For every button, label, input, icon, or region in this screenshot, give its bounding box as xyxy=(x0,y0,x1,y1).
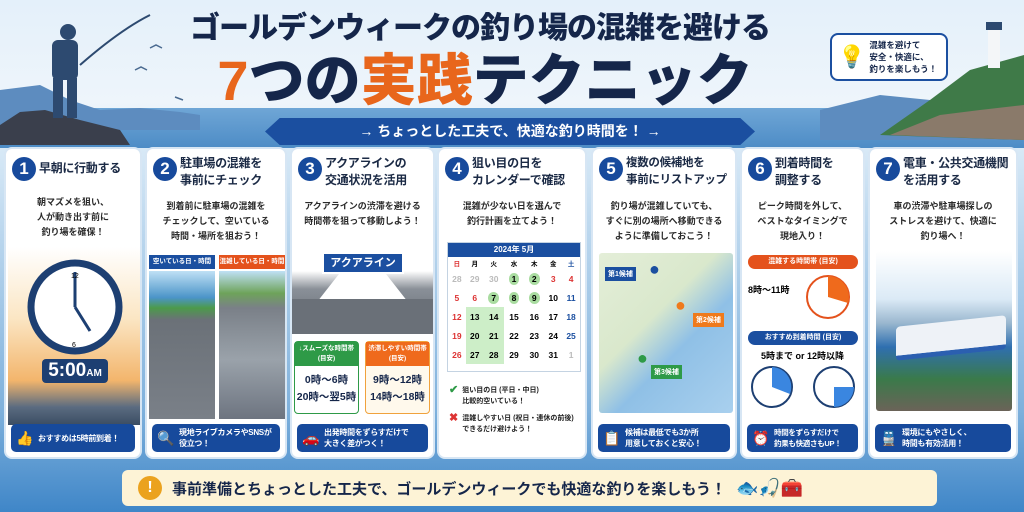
text 4: 混雑が少ない日を選んで xyxy=(463,201,561,211)
calendar: 17 xyxy=(548,312,558,322)
bottom bar 3: 大きく差がつく！ xyxy=(324,439,386,448)
illustration: clock sunrise xyxy=(8,247,140,425)
map: 第3候補 xyxy=(654,369,679,376)
calendar: 23 xyxy=(529,330,539,340)
recommended time clocks xyxy=(748,331,858,345)
map: 第1候補 xyxy=(608,271,633,278)
heading 2: 事前にチェック xyxy=(180,173,262,187)
bottom bar 2 xyxy=(152,424,280,452)
congested time clock xyxy=(748,255,858,269)
text 2: 到着前に駐車場の混雑を xyxy=(166,201,266,211)
text 4 xyxy=(463,200,561,226)
heading 2 xyxy=(180,156,262,187)
bottom bar 5: 📋 xyxy=(603,430,621,446)
footer banner: 事前準備とちょっとした工夫で、ゴールデンウィークでも快適な釣りを楽しもう！ xyxy=(172,480,726,498)
calendar xyxy=(447,242,581,372)
calendar: 31 xyxy=(548,350,558,360)
illustration: lighthouse and cliffs xyxy=(820,22,1024,140)
text 2: 時間・場所を狙おう！ xyxy=(171,231,261,241)
text 2 xyxy=(162,201,270,241)
callout: lightbulb xyxy=(830,33,948,81)
calendar: 火 xyxy=(491,261,497,268)
illustration: coastal train xyxy=(876,251,1012,411)
heading 3 xyxy=(325,156,407,187)
calendar: 20 xyxy=(470,330,479,340)
illustration: parking comparison: 空いている日・時間 xyxy=(153,258,211,265)
title: ゴールデンウィークの釣り場の混雑を避ける xyxy=(190,12,770,45)
bottom bar 6 xyxy=(747,424,858,452)
calendar: 水 xyxy=(511,261,517,268)
panel: 6 arrival time: 6 xyxy=(755,159,765,178)
calendar: 5 xyxy=(455,292,459,302)
bottom bar 2: 🔍 xyxy=(157,430,175,446)
heading 6 xyxy=(775,156,834,187)
heading 3: アクアラインの xyxy=(325,156,406,170)
map: 第2候補 xyxy=(696,317,721,324)
calendar: 9 xyxy=(532,292,537,302)
calendar: 18 xyxy=(566,312,576,322)
panel: 5 candidate spots: 5 xyxy=(606,159,616,178)
heading 5: 複数の候補地を xyxy=(626,157,704,169)
calendar: 26 xyxy=(452,350,462,360)
heading 7 xyxy=(903,156,1008,187)
panel: 3 aqualine: (目安) xyxy=(389,355,406,362)
panel: 1 early morning xyxy=(4,147,142,459)
calendar: 15 xyxy=(509,312,519,322)
calendar: 1 xyxy=(569,350,573,360)
calendar: 10 xyxy=(548,292,558,302)
bottom bar 5: 用意しておくと安心！ xyxy=(625,439,702,448)
calendar: 6 xyxy=(472,292,477,302)
recommended time clocks: おすすめ到着時間 (目安) xyxy=(765,334,841,341)
calendar: 29 xyxy=(509,350,519,360)
chart: smooth vs congested times: 0時〜6時 xyxy=(305,374,348,386)
text 2: チェックして、空いている xyxy=(162,216,270,226)
calendar: 24 xyxy=(548,330,558,340)
bottom bar 1: 👍 xyxy=(16,430,34,446)
text 3: 時間帯を狙って移動しよう！ xyxy=(304,216,421,226)
text 5 xyxy=(606,200,722,241)
panel: 1 early morning: 1 xyxy=(19,159,29,178)
panel: 3 aqualine: 3 xyxy=(305,159,315,178)
heading 6: 調整する xyxy=(775,173,822,187)
panel: 2 parking: 2 xyxy=(160,159,170,178)
panel: 5 candidate spots xyxy=(591,147,737,459)
heading 4: カレンダーで確認 xyxy=(472,173,565,187)
text 6 xyxy=(757,201,848,241)
text 5: すぐに別の場所へ移動できる xyxy=(606,216,722,226)
illustration: clock sunrise: 6 xyxy=(72,342,76,349)
panel: 6 arrival time: 8時〜11時 xyxy=(748,285,790,295)
calendar: 29 xyxy=(470,274,479,284)
panel: 3 aqualine: 9時〜12時 xyxy=(373,374,422,386)
panel: 3 aqualine xyxy=(290,147,435,459)
callout: lightbulb: 釣りを楽しもう！ xyxy=(869,64,937,74)
text 7: 釣り場へ！ xyxy=(920,231,966,241)
legend: ✖ xyxy=(449,412,458,424)
calendar: 28 xyxy=(489,350,498,360)
heading 1: 早朝に行動する xyxy=(39,161,121,175)
panel: 3 aqualine: 渋滞しやすい時間帯 xyxy=(368,345,427,352)
ribbon tagline: → ちょっとした工夫で、快適な釣り時間を！ → xyxy=(359,123,661,139)
chart: smooth vs congested times xyxy=(294,341,359,414)
legend: 混雑しやすい日 (祝日・連休の前後) xyxy=(462,415,574,422)
panel: 3 aqualine: 14時〜18時 xyxy=(370,391,425,403)
text 7: ストレスを避けて、快適に xyxy=(889,216,997,226)
illustration: parking comparison xyxy=(149,255,285,419)
calendar: 2 xyxy=(532,274,537,284)
panel: 3 aqualine: アクアライン xyxy=(330,257,396,269)
calendar: 金 xyxy=(550,261,556,268)
callout: lightbulb: 💡 xyxy=(838,44,865,69)
legend: 比較的空いている！ xyxy=(462,398,525,405)
calendar: 7 xyxy=(491,292,496,302)
text 3: アクアラインの渋滞を避ける xyxy=(304,201,421,211)
heading 5: 事前にリストアップ xyxy=(626,174,727,186)
text 4: 釣行計画を立てよう！ xyxy=(467,216,557,226)
panel: 4 calendar: 4 xyxy=(452,159,462,178)
chart: smooth vs congested times: 20時〜翌5時 xyxy=(297,391,356,403)
panel: 7 train xyxy=(868,147,1018,459)
calendar: 12 xyxy=(452,312,462,322)
calendar: 11 xyxy=(567,292,576,302)
panel: 6 arrival time: 5時まで or 12時以降 xyxy=(761,351,844,361)
calendar: 27 xyxy=(470,350,479,360)
calendar: 4 xyxy=(569,274,573,284)
text 1: 人が動き出す前に xyxy=(37,212,109,222)
text 7: 車の渋滞や駐車場探しの xyxy=(893,201,992,211)
text 6: ベストなタイミングで xyxy=(757,216,848,226)
bottom bar 6: ⏰ xyxy=(752,430,770,446)
callout: lightbulb: 安全・快適に、 xyxy=(869,52,929,62)
map: ● xyxy=(637,348,648,368)
calendar: 21 xyxy=(489,330,498,340)
illustration: highway xyxy=(292,272,433,299)
panel: 6 arrival time xyxy=(740,147,865,459)
bottom bar 2: 役立つ！ xyxy=(179,439,210,448)
footer banner xyxy=(122,470,937,506)
panel: 4 calendar xyxy=(437,147,587,459)
chart: smooth vs congested times: (目安) xyxy=(318,355,335,362)
illustration: fisherman on rock xyxy=(0,14,200,145)
text 1: 朝マズメを狙い、 xyxy=(37,197,109,207)
heading 3: 交通状況を活用 xyxy=(325,173,407,187)
bottom bar 3: 🚗 xyxy=(302,430,320,446)
text 7 xyxy=(889,201,997,241)
text 1: 釣り場を確保！ xyxy=(41,227,104,237)
heading 4 xyxy=(472,156,565,187)
calendar: 木 xyxy=(531,261,537,268)
text 1 xyxy=(37,196,109,237)
bottom bar 5: 候補は最低でも3か所 xyxy=(625,428,698,437)
illustration: parking comparison: 混雑している日・時間 xyxy=(220,258,284,265)
bottom bar 7: 🚆 xyxy=(880,430,898,446)
bottom bar 1: おすすめは5時前到着！ xyxy=(38,434,119,442)
text 6: 現地入り！ xyxy=(780,231,825,241)
subtitle big: 7つの実践テクニック xyxy=(217,49,753,112)
heading 7: 電車・公共交通機関 xyxy=(903,156,1008,170)
calendar: 14 xyxy=(489,312,498,322)
text 5: 釣り場が混雑していても、 xyxy=(611,201,717,211)
bottom bar 1 xyxy=(11,424,135,452)
heading 4: 狙い目の日を xyxy=(472,156,542,170)
calendar: 土 xyxy=(568,261,574,268)
bottom bar 7 xyxy=(875,424,1011,452)
text 3 xyxy=(304,201,421,226)
calendar: 1 xyxy=(512,274,516,284)
heading 5 xyxy=(626,156,727,186)
map xyxy=(599,253,733,413)
congested time clock: 混雑する時間帯 (目安) xyxy=(768,258,838,265)
legend: 狙い目の日 (平日・中日) xyxy=(462,387,539,394)
text 6: ピーク時間を外して、 xyxy=(758,201,847,211)
footer banner: ! xyxy=(147,479,153,496)
panel: 2 parking xyxy=(145,147,287,459)
calendar: 30 xyxy=(489,274,498,284)
calendar: 25 xyxy=(566,330,576,340)
bottom bar 6: 釣果も快適さもUP！ xyxy=(774,439,841,448)
illustration: clock sunrise: 12 xyxy=(71,273,79,280)
chart: smooth vs congested times: ↓スムーズな時間帯 xyxy=(299,345,354,352)
calendar: 2024年 5月 xyxy=(494,245,534,254)
panel: 7 train: 7 xyxy=(883,159,893,178)
bottom bar 7: 環境にもやさしく、 xyxy=(902,428,971,437)
footer banner: 🐟🎣🧰 xyxy=(736,478,803,498)
bottom bar 7: 時間も有効活用！ xyxy=(902,439,964,448)
legend: ✔ xyxy=(449,384,458,396)
calendar: 8 xyxy=(512,292,516,302)
bottom bar 6: 時間をずらすだけで xyxy=(774,428,839,437)
bottom bar 3 xyxy=(297,424,428,452)
calendar: 16 xyxy=(529,312,539,322)
calendar: 3 xyxy=(551,274,556,284)
calendar: 日 xyxy=(454,261,460,268)
calendar: 月 xyxy=(471,261,478,268)
calendar: 30 xyxy=(529,350,539,360)
legend: できるだけ避けよう！ xyxy=(462,426,532,433)
heading 6: 到着時間を xyxy=(775,156,834,170)
calendar: 13 xyxy=(470,312,479,322)
bottom bar 3: 出発時間をずらすだけで xyxy=(324,428,409,437)
callout: lightbulb: 混雑を避けて xyxy=(869,40,920,50)
map: ● xyxy=(675,295,686,315)
bottom bar 2: 現地ライブカメラやSNSが xyxy=(179,428,272,437)
map: ● xyxy=(649,259,660,279)
ribbon tagline xyxy=(265,118,755,145)
calendar: 19 xyxy=(452,330,462,340)
bottom bar 5 xyxy=(598,424,730,452)
illustration: clock sunrise: 5:00AM xyxy=(48,360,102,381)
heading 2: 駐車場の混雑を xyxy=(180,156,262,170)
text 5: ように準備しておこう！ xyxy=(615,231,713,241)
calendar: 22 xyxy=(509,330,519,340)
legend xyxy=(449,384,574,433)
background sea xyxy=(0,108,1024,148)
calendar: 28 xyxy=(452,274,462,284)
heading 7: を活用する xyxy=(903,173,962,187)
